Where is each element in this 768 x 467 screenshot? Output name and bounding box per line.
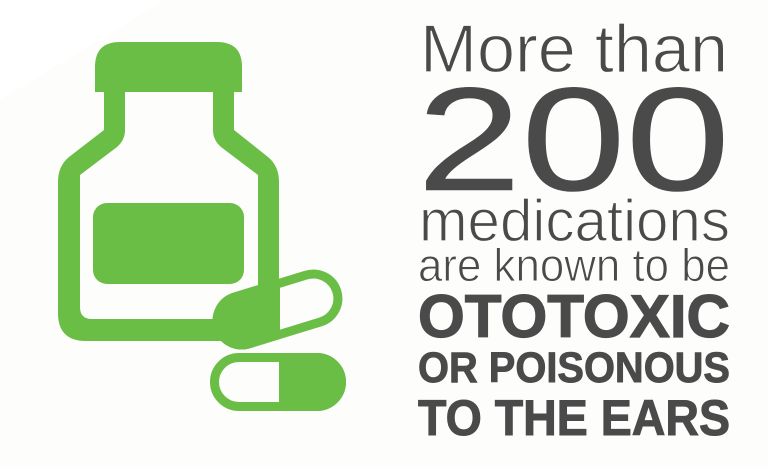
- number: 200: 200: [417, 58, 730, 222]
- icon: horizontal capsule: [214, 353, 346, 411]
- text: medications: medications: [419, 188, 730, 254]
- icon: bottle: [58, 42, 279, 341]
- text block: headline: [417, 11, 730, 446]
- text: OTOTOXIC: OTOTOXIC: [418, 283, 730, 350]
- text: OR POISONOUS: OR POISONOUS: [418, 344, 730, 392]
- icon: medicine bottle with pills: [58, 42, 350, 411]
- icon: tilted capsule: [212, 270, 342, 350]
- text: are known to be: are known to be: [418, 239, 730, 291]
- infographic: ototoxic medications: [58, 24, 729, 436]
- text: More than: More than: [420, 11, 728, 87]
- text: TO THE EARS: TO THE EARS: [418, 390, 730, 446]
